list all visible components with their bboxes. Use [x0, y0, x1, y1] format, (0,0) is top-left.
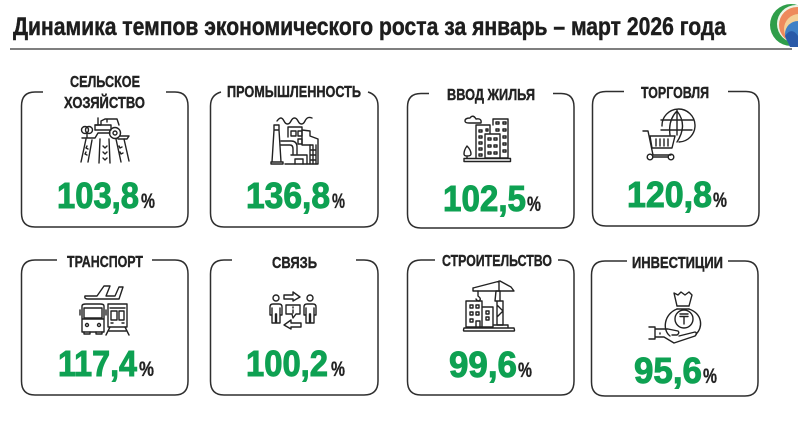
- icon: plane, bus and train: [80, 286, 129, 335]
- value: 103,8%: %: [141, 190, 155, 213]
- heading: инвестиции: ИНВЕСТИЦИИ: [632, 255, 723, 272]
- heading: строительство: СТРОИТЕЛЬСТВО: [442, 253, 552, 270]
- panel: строительство: [408, 253, 574, 395]
- value: 100,2%: 100,2: [246, 343, 328, 384]
- value: 95,6%: 95,6: [634, 350, 702, 391]
- value: 120,8%: 120,8: [627, 174, 712, 215]
- panel: инвестиции: [592, 255, 758, 396]
- value: 95,6%: %: [703, 365, 717, 388]
- heading: промышленность: ПРОМЫШЛЕННОСТЬ: [227, 84, 361, 101]
- value: 99,6%: 99,6: [449, 344, 517, 385]
- value: 117,4%: 117,4: [58, 343, 137, 384]
- panel: связь: [210, 255, 378, 395]
- value: 120,8%: %: [713, 189, 727, 212]
- value: 136,8%: %: [332, 190, 345, 213]
- icon: shopping cart and globe: [643, 109, 695, 160]
- icon: factory: [271, 117, 318, 164]
- value: 117,4%: %: [139, 358, 154, 381]
- panel: ввод жилья: [408, 87, 574, 228]
- icon: tower crane and building: [464, 281, 514, 331]
- panel: транспорт: [22, 254, 188, 395]
- value: 102,5%: 102,5: [443, 178, 526, 219]
- heading: торговля: ТОРГОВЛЯ: [641, 85, 709, 102]
- value: 102,5%: %: [527, 193, 541, 216]
- value: 99,6%: %: [518, 359, 532, 382]
- heading: сельское хозяйство: ХОЗЯЙСТВО: [64, 93, 145, 112]
- heading: ввод жилья: ВВОД ЖИЛЬЯ: [447, 87, 535, 104]
- value: 100,2%: %: [331, 358, 345, 381]
- heading: сельское хозяйство: СЕЛЬСКОЕ: [70, 74, 140, 91]
- panel: промышленность: [210, 84, 378, 227]
- icon: hand holding money bag: [649, 292, 701, 343]
- panel: сельское хозяйство: [22, 74, 188, 227]
- value: 103,8%: 103,8: [57, 175, 139, 216]
- icon: tractor in a field: [81, 118, 129, 163]
- heading: связь: СВЯЗЬ: [272, 255, 317, 272]
- value: 136,8%: 136,8: [246, 175, 330, 216]
- logo: [770, 4, 800, 47]
- icon: two people exchanging information: [270, 292, 316, 329]
- icon: residential buildings: [464, 116, 510, 162]
- heading: сельское хозяйство: [64, 74, 145, 112]
- heading: транспорт: ТРАНСПОРТ: [67, 254, 143, 271]
- panel: торговля: [592, 85, 759, 226]
